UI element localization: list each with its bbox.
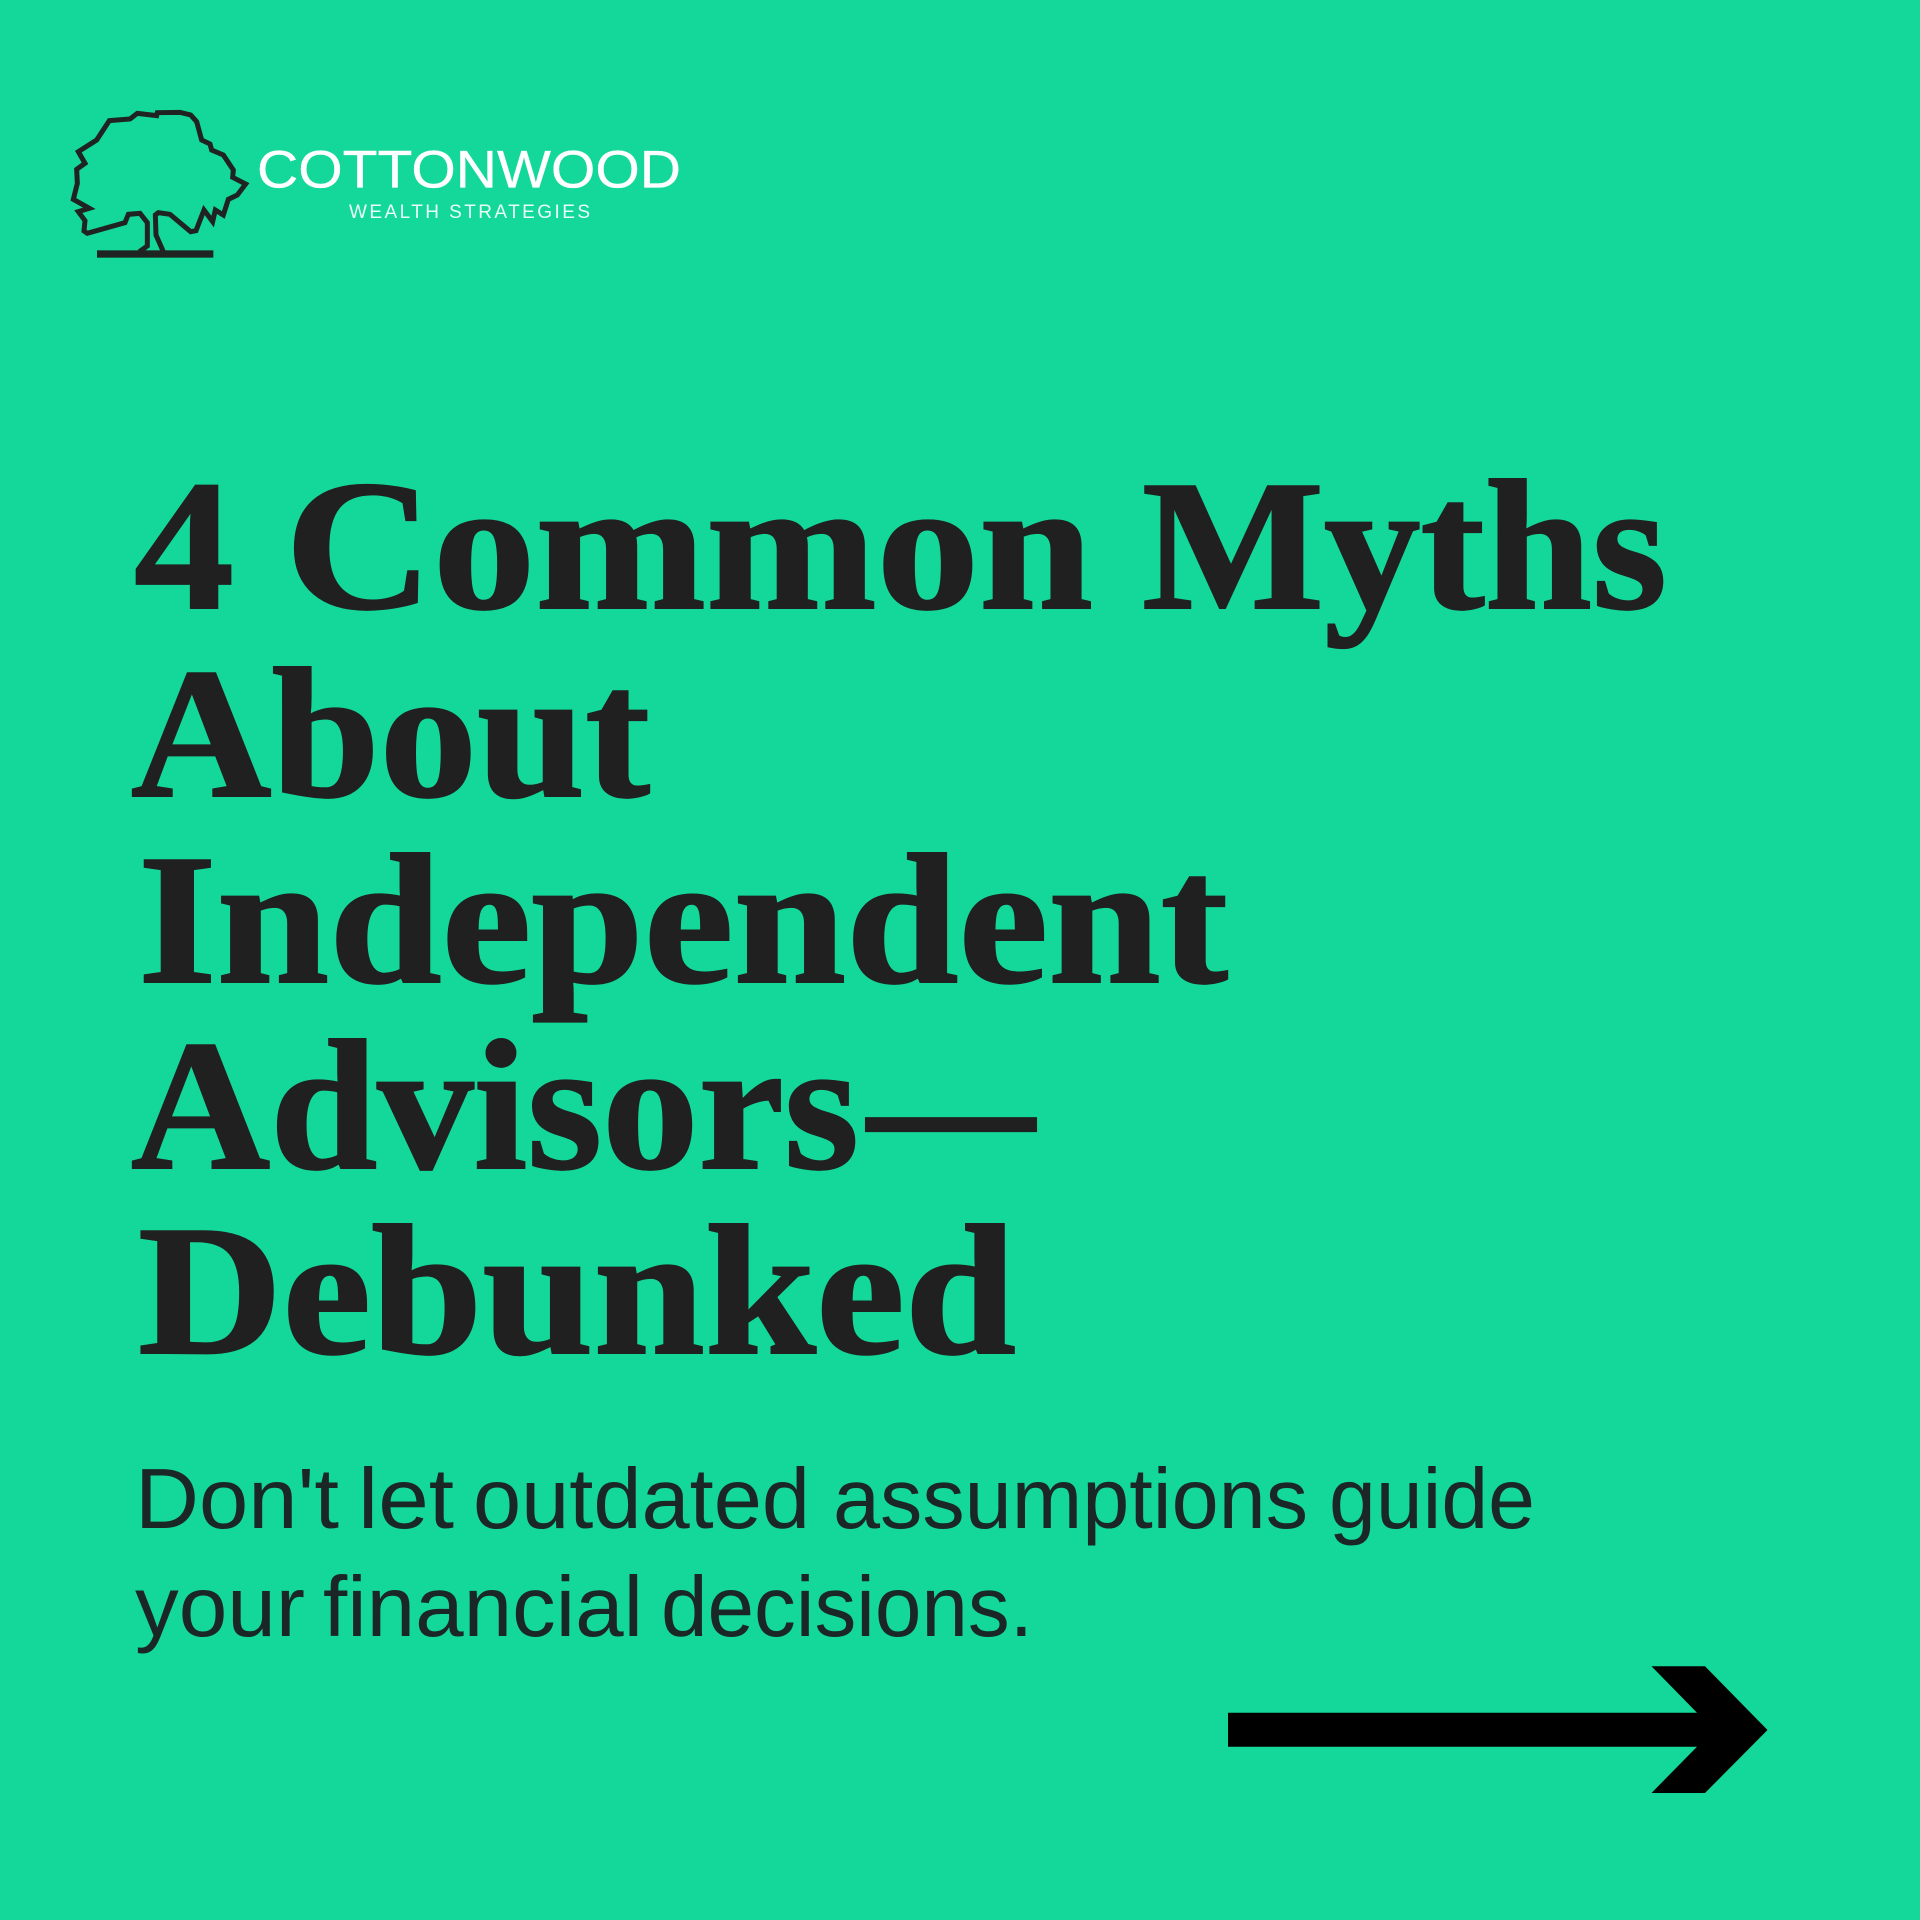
title: [131, 443, 1667, 1394]
subtitle: guide: [1329, 1452, 1535, 1547]
logo wordmark: COTTONWOOD: [257, 140, 681, 200]
title: About: [131, 631, 650, 837]
title: Myths: [1142, 443, 1667, 649]
subtitle: Don't: [135, 1452, 339, 1547]
subtitle: [135, 1452, 1535, 1655]
logo: Cottonwood Wealth Strategies: [73, 112, 681, 258]
title: Advisors: [131, 1003, 859, 1209]
icon: tree outline: [73, 112, 246, 258]
logo tagline: WEALTH STRATEGIES: [349, 202, 590, 223]
subtitle: decisions.: [661, 1560, 1033, 1655]
title: —: [865, 1003, 1037, 1209]
title: Common: [285, 443, 1093, 649]
title: 4: [134, 443, 234, 649]
subtitle: your: [135, 1560, 305, 1655]
subtitle: let: [358, 1452, 454, 1547]
subtitle: assumptions: [833, 1452, 1308, 1547]
subtitle: financial: [323, 1560, 643, 1655]
arrow: [1228, 1666, 1768, 1793]
subtitle: outdated: [473, 1452, 810, 1547]
title: Independent: [138, 817, 1228, 1023]
title: Debunked: [138, 1188, 1016, 1394]
